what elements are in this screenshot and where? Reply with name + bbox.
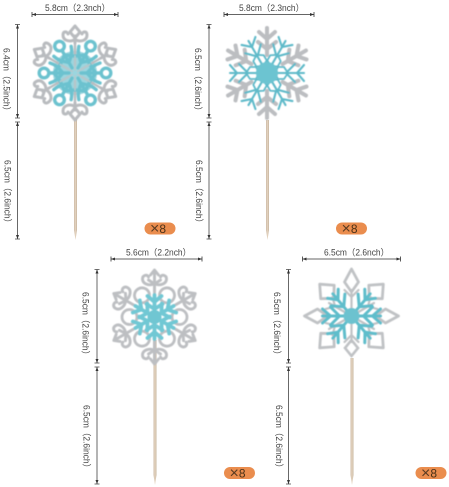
quantity badge 4 (416, 465, 446, 482)
snowflake 1 (28, 26, 122, 120)
height label 4 top: 6.5cm（2.6inch） (272, 292, 282, 359)
height label 2 top: 6.5cm（2.6inch） (193, 48, 203, 115)
height dimension 3 (94, 270, 100, 484)
width label 3: 5.6cm（2.2nch） (126, 248, 191, 258)
height label 3 bottom: 6.5cm（2.6inch） (82, 405, 92, 472)
quantity badge 3: 8 (239, 466, 246, 480)
quantity badge 2: × (342, 220, 351, 238)
height label 3 top: 6.5cm（2.6inch） (80, 292, 90, 359)
quantity badge 3 (224, 465, 255, 482)
width label 2: 5.8cm（2.3nch） (239, 3, 304, 13)
toothpick 1 (74, 119, 77, 240)
quantity badge 2 (336, 220, 367, 238)
snowflake 2 (224, 28, 310, 118)
panel: topper 1 (2, 3, 176, 240)
quantity badge 1: 8 (159, 222, 166, 236)
quantity badge 3: × (230, 465, 239, 482)
panel: topper 3 (80, 248, 255, 485)
snowflake 4 (304, 269, 398, 356)
quantity badge 4: 8 (430, 466, 437, 480)
width label 1: 5.8cm（2.3nch） (45, 3, 110, 13)
toothpick 2 (266, 120, 269, 240)
toothpick 3 (154, 340, 156, 485)
height dimension 1 (15, 24, 20, 239)
width dimension 3 (111, 256, 202, 262)
height label 4 bottom: 6.5cm（2.6inch） (274, 405, 284, 472)
width label 4: 6.5cm（2.6nch） (324, 248, 389, 258)
height label 1 bottom: 6.5cm（2.6inch） (2, 160, 12, 227)
width dimension 1 (32, 12, 118, 17)
width dimension 2 (224, 12, 314, 17)
height dimension 2 (206, 24, 212, 239)
toothpick 4 (350, 358, 354, 485)
quantity badge 1: × (150, 220, 159, 238)
quantity badge 4: × (421, 465, 430, 482)
width dimension 4 (302, 256, 400, 262)
snowflake 3 (108, 270, 201, 364)
height label 2 bottom: 6.5cm（2.6inch） (194, 160, 204, 227)
height label 1 top: 6.4cm（2.5inch） (2, 48, 12, 115)
panel: topper 4 (272, 248, 446, 485)
quantity badge 1 (144, 220, 176, 238)
height dimension 4 (286, 270, 291, 484)
panel: topper 2 (193, 3, 367, 240)
quantity badge 2: 8 (351, 222, 358, 236)
